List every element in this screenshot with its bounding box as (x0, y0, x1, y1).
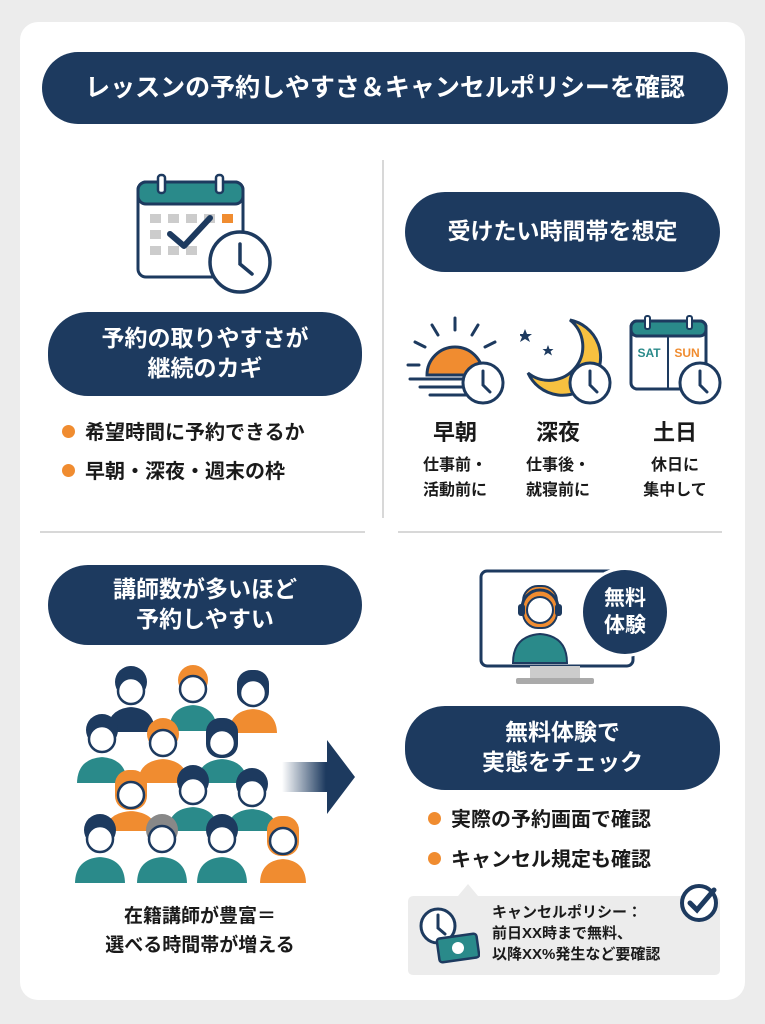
caption: instructors: 在籍講師が豊富＝ (124, 906, 276, 927)
pill: ease of booking: 継続のカギ (148, 355, 262, 381)
callout: cancel policy: 以降XX%発生など要確認 (492, 946, 660, 963)
bullet list right: キャンセル規定も確認 (451, 849, 651, 871)
icon: sunrise (406, 316, 504, 404)
icon: clock and money (420, 908, 480, 964)
callout: cancel policy: キャンセルポリシー： (492, 904, 642, 921)
bullet list right: 実際の予約画面で確認 (451, 809, 651, 831)
icon: check badge (680, 884, 718, 922)
label: late night (526, 420, 590, 499)
caption: instructors (105, 906, 295, 956)
pill: free trial check: 無料体験で (505, 719, 620, 745)
bullet list left (62, 422, 305, 483)
pill: ease of booking: 予約の取りやすさが (102, 325, 308, 351)
pill: time slots: 受けたい時間帯を想定 (448, 218, 678, 244)
icon: weekend calendar: SUN (674, 346, 700, 360)
label: late night: 就寝前に (526, 482, 590, 499)
pill: time slots (405, 192, 720, 272)
icon: moon (520, 318, 612, 404)
callout: cancel policy: 前日XX時まで無料、 (492, 925, 632, 942)
label: early morning: 早朝 (433, 420, 477, 445)
pill: free trial check: 実態をチェック (482, 749, 643, 775)
icon: monitor with operator (480, 570, 634, 684)
bullet list left: 希望時間に予約できるか (85, 422, 305, 444)
icon: calendar with clock (136, 174, 272, 294)
label: late night: 仕事後・ (526, 457, 590, 474)
label: weekend: 休日に (651, 457, 699, 474)
bubble: free trial: 体験 (604, 614, 646, 637)
bullet list left: 早朝・深夜・週末の枠 (85, 461, 285, 483)
pill: ease of booking (48, 312, 362, 396)
bubble: free trial (580, 567, 670, 657)
pill: more instructors (48, 565, 362, 645)
illustration: group of instructors (75, 665, 306, 883)
pill: more instructors: 予約しやすい (136, 606, 274, 632)
bullet list right (428, 808, 651, 871)
label: weekend: 土日 (653, 420, 697, 445)
pill: more instructors: 講師数が多いほど (113, 576, 297, 602)
label: early morning: 活動前に (423, 482, 487, 499)
title: レッスンの予約しやすさ＆キャンセルポリシーを確認 (85, 74, 685, 102)
icon: weekend calendar: SAT (637, 346, 661, 360)
arrow (284, 740, 355, 814)
label: late night: 深夜 (536, 420, 580, 445)
label: early morning: 仕事前・ (423, 457, 487, 474)
label: weekend (643, 420, 707, 499)
pill: free trial check (405, 706, 720, 790)
icon: weekend calendar (630, 315, 722, 404)
caption: instructors: 選べる時間帯が増える (105, 935, 295, 956)
callout: cancel policy (408, 884, 720, 975)
title (42, 52, 728, 124)
label: early morning (423, 420, 487, 499)
label: weekend: 集中して (643, 482, 707, 499)
bubble: free trial: 無料 (604, 587, 646, 610)
